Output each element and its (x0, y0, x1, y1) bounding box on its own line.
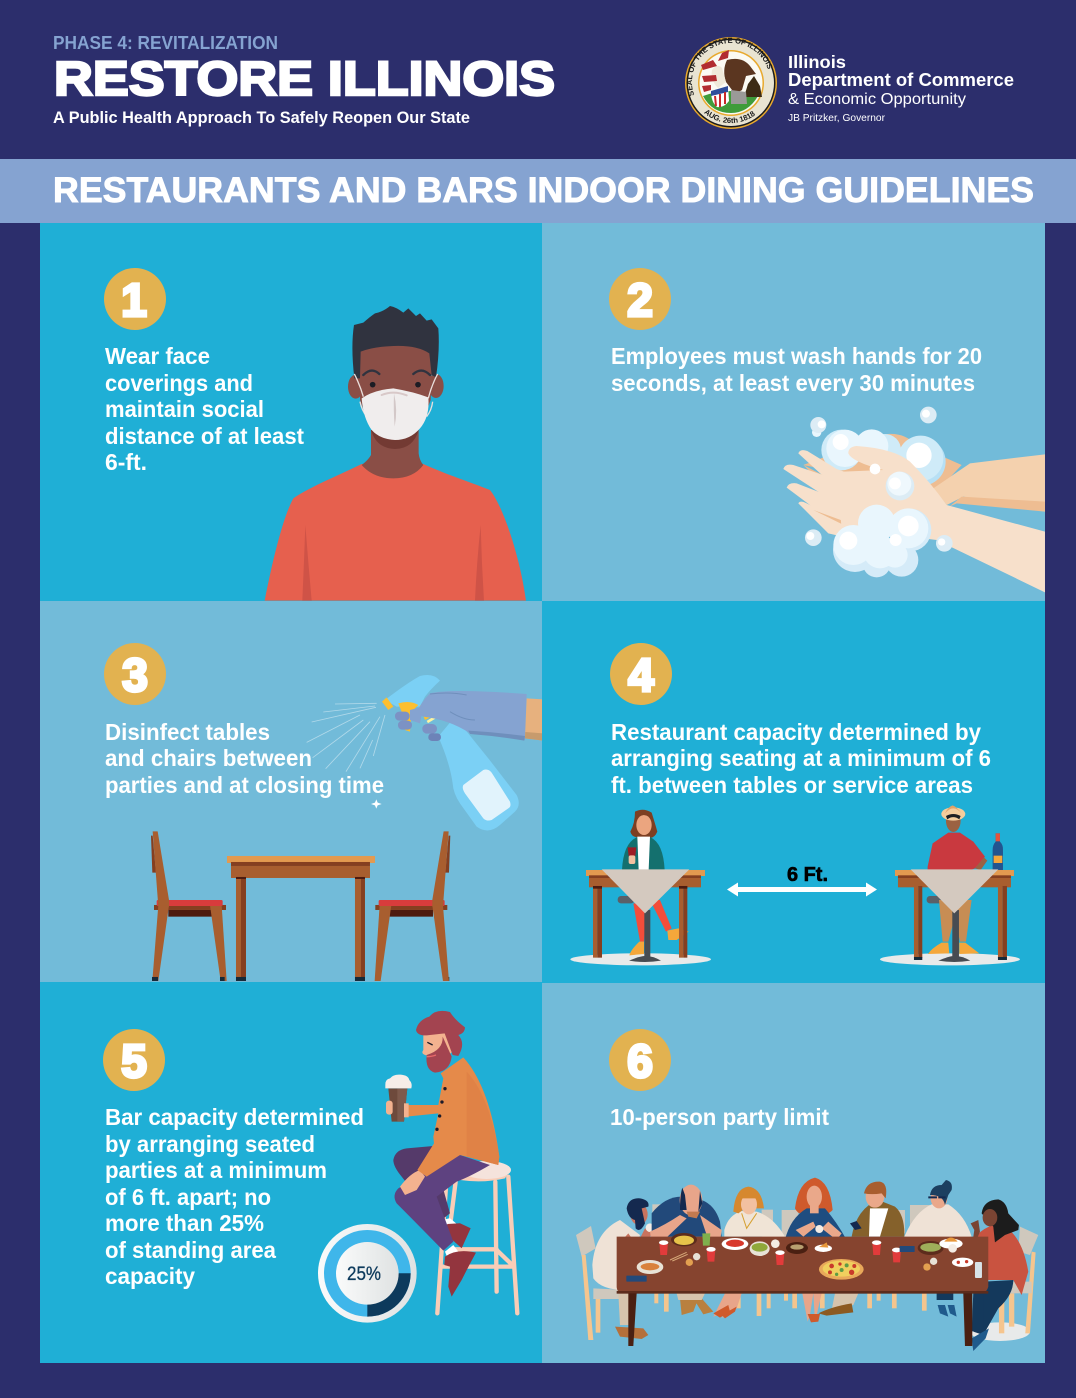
text: step 1: maintain social (105, 396, 264, 422)
icon: left chair (151, 831, 227, 981)
icon: state seal of Illinois: SEAL OF THE STATE OF ILLINOIS (686, 38, 772, 96)
header: program title block (53, 33, 555, 127)
illustration: seated man with hat at table (880, 805, 1020, 965)
arrow: six feet spacing (727, 882, 877, 896)
badge: number 5: 5 (121, 1035, 147, 1087)
panel: step 4 restaurant capacity (542, 601, 1045, 983)
badge: number 6 (609, 1029, 671, 1091)
header: department logo text (788, 52, 1014, 124)
agency line one: Illinois (788, 52, 846, 72)
text: step 6: 10-person party limit (610, 1104, 829, 1130)
badge: number 6: 6 (627, 1035, 653, 1087)
panel: step 2 hand washing (542, 223, 1045, 601)
governor line: JB Pritzker, Governor (788, 112, 885, 124)
text: step 3 (105, 719, 384, 798)
text: step 2 (611, 343, 982, 396)
panel: step 6 party limit (542, 983, 1045, 1363)
main title: RESTORE ILLINOIS (54, 53, 555, 106)
text: step 3: Disinfect tables (105, 719, 270, 745)
text: step 5: of standing area (105, 1237, 277, 1263)
chart: 25 percent donut (318, 1224, 417, 1323)
badge: number 1: 1 (121, 274, 147, 326)
icon: state seal of Illinois: AUG. 26th 1818 (704, 110, 755, 124)
text: step 4 (611, 719, 991, 798)
panel: step 1 face coverings (40, 223, 542, 601)
text: step 1 (105, 343, 304, 475)
badge: number 4 (610, 643, 672, 705)
badge: number 3: 3 (122, 649, 148, 701)
badge: number 2 (609, 268, 671, 330)
agency line two: Department of Commerce (788, 69, 1014, 90)
icon: dining table (227, 856, 375, 981)
text: step 5: parties at a minimum (105, 1157, 327, 1183)
text: step 3: parties and at closing time (105, 772, 384, 798)
text: step 2: seconds, at least every 30 minutes (611, 370, 975, 396)
text: step 5 (105, 1104, 364, 1289)
banner: guidelines heading (0, 159, 1076, 223)
phase label: PHASE 4: REVITALIZATION (53, 33, 278, 53)
text: step 5: capacity (105, 1263, 195, 1289)
text: step 1: distance of at least (105, 423, 304, 449)
agency line three: & Economic Opportunity (788, 91, 966, 108)
text: step 5: of 6 ft. apart; no (105, 1184, 271, 1210)
text: step 1: coverings and (105, 370, 253, 396)
text: step 2: Employees must wash hands for 20 (611, 343, 982, 369)
badge: number 4: 4 (628, 649, 654, 701)
text: step 4: Restaurant capacity determined by (611, 719, 981, 745)
illustration: ten person dinner table (576, 1178, 1038, 1351)
illustration: seated woman at table (570, 810, 711, 965)
text: step 1: 6-ft. (105, 449, 147, 475)
badge: number 2: 2 (627, 274, 653, 326)
text: step 1: Wear face (105, 343, 210, 369)
icon: man wearing a face mask (265, 306, 526, 601)
icon: soapy washing hands (783, 407, 1045, 592)
icon: state seal of Illinois (685, 37, 777, 129)
text: step 4: ft. between tables or service areas (611, 772, 973, 798)
panel: step 5 bar capacity (40, 982, 542, 1363)
subtitle: A Public Health Approach To Safely Reopen Our State (53, 109, 470, 127)
icon: man with beer on bar stool (385, 1011, 517, 1313)
label: 6 Ft.: 6 Ft. (787, 864, 828, 886)
banner: guidelines heading: RESTAURANTS AND BARS INDOOR DINING GUIDELINES (53, 170, 1034, 210)
text: step 5: Bar capacity determined (105, 1104, 364, 1130)
badge: number 3 (104, 643, 166, 705)
badge: number 5 (103, 1029, 165, 1091)
text: step 5: by arranging seated (105, 1131, 315, 1157)
text: step 4: arranging seating at a minimum of 6 (611, 745, 991, 771)
text: step 5: more than 25% (105, 1210, 264, 1236)
icon: gloved hand with spray bottle (307, 675, 543, 830)
badge: number 1 (104, 268, 166, 330)
text: step 3: and chairs between (105, 745, 312, 771)
panel: step 3 disinfect tables (40, 601, 543, 982)
chart: 25 percent donut: 25% (347, 1264, 381, 1285)
icon: right chair (375, 831, 450, 981)
